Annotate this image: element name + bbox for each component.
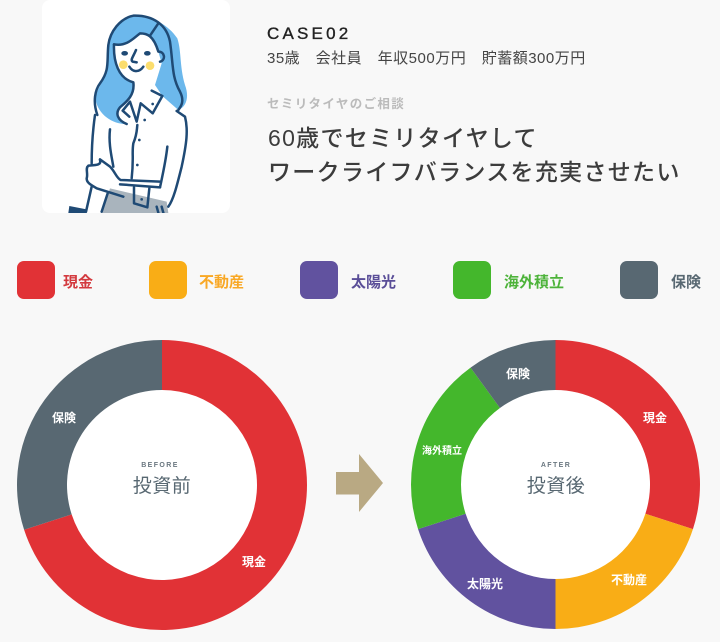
center title: before investment: 投資前	[133, 475, 191, 497]
label: insurance: 保険	[52, 411, 76, 425]
panel: portrait card	[42, 0, 230, 213]
icon: woman illustration	[68, 14, 188, 213]
legend label: insurance: 保険	[671, 274, 701, 291]
legend label: overseas savings: 海外積立	[504, 274, 564, 291]
label: solar: 太陽光	[467, 576, 503, 591]
donut chart: after investment	[411, 340, 700, 629]
legend label: real estate: 不動産	[199, 274, 244, 291]
segment: overseas savings 20%	[411, 368, 500, 529]
label: insurance: 保険	[506, 367, 530, 381]
legend swatch: overseas savings	[453, 261, 491, 299]
label: overseas savings: 海外積立	[422, 444, 462, 457]
segment: solar 20%	[418, 514, 556, 629]
legend label: cash: 現金	[63, 274, 93, 291]
center caption: before: BEFORE	[141, 462, 179, 469]
legend swatch: insurance	[620, 261, 658, 299]
label: cash: 現金	[242, 554, 266, 569]
arrow	[336, 454, 383, 512]
segment: real estate 20%	[556, 514, 693, 629]
center caption: after: AFTER	[541, 462, 571, 469]
segment: insurance 10%	[471, 340, 556, 408]
profile details: 35歳 会社員 年収500万円 貯蓄額300万円	[267, 50, 586, 67]
donut chart: before investment	[17, 340, 307, 630]
headline: 60歳でセミリタイヤして	[268, 125, 538, 151]
headline	[268, 125, 681, 185]
label: real estate: 不動産	[611, 572, 647, 587]
legend swatch: real estate	[149, 261, 187, 299]
legend	[17, 261, 701, 299]
legend swatch: cash	[17, 261, 55, 299]
segment: cash 70%	[24, 340, 307, 630]
segment: cash 30%	[556, 340, 700, 529]
headline: ワークライフバランスを充実させたい	[268, 159, 681, 185]
label: cash: 現金	[643, 410, 667, 425]
legend label: solar: 太陽光	[351, 274, 396, 291]
legend swatch: solar	[300, 261, 338, 299]
segment: insurance 30%	[17, 340, 162, 530]
center title: after investment: 投資後	[527, 475, 585, 497]
consultation label: セミリタイヤのご相談	[267, 97, 405, 111]
case title: CASE02	[267, 24, 351, 43]
